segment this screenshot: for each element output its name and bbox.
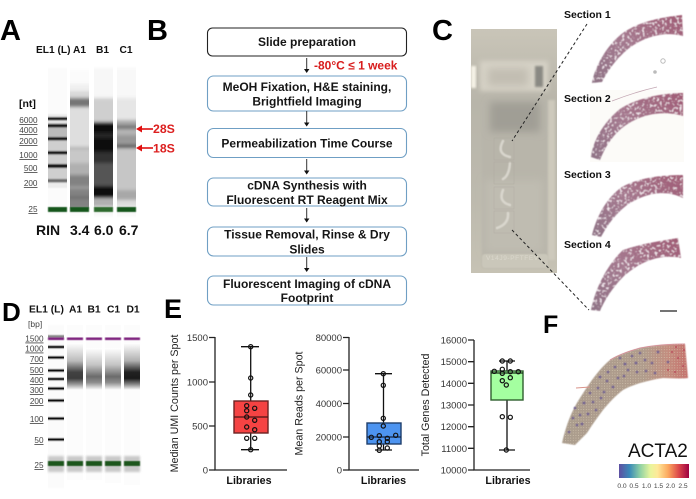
chart: median UMI counts: Median UMI Counts per Spot xyxy=(169,335,181,472)
bp labels: [bp] xyxy=(28,319,42,329)
panel E: box plots xyxy=(164,294,531,487)
chart: median UMI counts xyxy=(169,333,287,487)
lane C1 xyxy=(117,68,136,216)
lane labels A: C1 xyxy=(120,45,133,56)
nt size labels: 200 xyxy=(24,179,38,188)
panel C: slide photo and sections xyxy=(432,9,684,311)
nt size labels: 2000 xyxy=(19,137,38,146)
panel letter B: B xyxy=(147,15,168,47)
section labels: Section 1 xyxy=(564,9,611,21)
nt size labels: 4000 xyxy=(19,126,38,135)
panel letter D: D xyxy=(2,297,21,327)
section 1 tissue xyxy=(592,15,683,83)
panel letter C: C xyxy=(432,15,453,47)
step: fixation: MeOH Fixation, H&E staining, xyxy=(223,80,391,94)
section 2 tissue xyxy=(591,93,683,160)
RIN values xyxy=(36,222,139,238)
lane labels D: B1 xyxy=(88,304,101,316)
bp labels xyxy=(25,319,44,470)
chart: median UMI counts: 500 xyxy=(192,422,208,432)
step: tissue removal xyxy=(208,227,406,256)
panel B: workflow xyxy=(147,15,406,305)
lane labels D: EL1 (L) xyxy=(29,304,64,316)
bp labels: 500 xyxy=(30,366,44,375)
nt size labels xyxy=(19,98,38,214)
chart: total genes: 15000 xyxy=(441,357,467,368)
spatial tissue map xyxy=(562,344,688,445)
arrow xyxy=(304,159,309,174)
step: fluorescent imaging: Footprint xyxy=(281,291,333,305)
chart: total genes: Libraries xyxy=(485,475,531,487)
chart: total genes: 13000 xyxy=(441,400,467,412)
panel letter A: A xyxy=(0,15,21,47)
chart: total genes: Total Genes Detected xyxy=(420,354,432,456)
step: fixation xyxy=(208,76,406,111)
lane labels A: B1 xyxy=(96,45,109,56)
ladder lane D xyxy=(48,325,64,488)
panel A: RNA gel xyxy=(0,15,175,238)
colour bar ticks: 0.5 xyxy=(629,483,639,490)
chart: median UMI counts: 1000 xyxy=(187,378,208,388)
gene label: ACTA2 xyxy=(628,441,688,462)
RIN values: 6.0 xyxy=(94,222,114,238)
step: permeabilization xyxy=(208,128,406,158)
bp labels: 100 xyxy=(30,415,44,424)
section image backgrounds xyxy=(590,90,684,162)
nt size labels: 1000 xyxy=(19,151,38,160)
sample lanes D xyxy=(67,325,140,485)
lane labels A xyxy=(36,45,133,56)
slide photograph xyxy=(471,29,557,273)
RIN values: RIN xyxy=(36,222,60,238)
chart: mean reads: 0 xyxy=(337,466,342,476)
arrow 18S xyxy=(136,142,175,156)
green marker band A xyxy=(48,207,136,212)
section labels: Section 3 xyxy=(564,169,611,181)
arrow xyxy=(304,208,309,222)
lane labels A: EL1 (L) A1 xyxy=(36,45,86,56)
section 2 tissue strand xyxy=(612,87,657,101)
colour bar ticks: 1.5 xyxy=(654,483,663,490)
arrow xyxy=(304,257,309,272)
chart: median UMI counts: 0 xyxy=(203,466,208,476)
bp labels: 50 xyxy=(34,436,44,445)
arrow 28S xyxy=(136,122,175,136)
lane labels D xyxy=(29,304,140,316)
step: cDNA synthesis: Fluorescent RT Reagent Mix xyxy=(226,193,388,207)
lane A1 xyxy=(70,70,89,216)
chart: total genes: 10000 xyxy=(441,466,467,476)
nt size labels: 500 xyxy=(24,164,38,173)
step: tissue removal: Slides xyxy=(289,242,325,256)
colour bar ticks: 2.5 xyxy=(678,483,688,490)
arrow 28S: 28S xyxy=(153,122,175,136)
chart: mean reads: Mean Reads per Spot xyxy=(294,351,306,455)
panel letter F: F xyxy=(543,311,558,339)
chart: mean reads: 80000 xyxy=(316,333,342,344)
colour bar ticks: 1.0 xyxy=(642,483,651,490)
purple marker band xyxy=(48,338,140,340)
step: tissue removal: Tissue Removal, Rinse & Dry xyxy=(224,228,390,242)
lane labels D: C1 xyxy=(107,304,120,316)
lane B1 xyxy=(94,68,113,216)
section labels: Section 4 xyxy=(564,239,611,251)
step: cDNA synthesis xyxy=(208,178,406,207)
RIN values: 6.7 xyxy=(119,222,139,238)
green marker band D xyxy=(48,461,140,466)
chart: total genes: 11000 xyxy=(441,444,467,455)
panel D: library gel xyxy=(2,297,140,488)
chart: total genes xyxy=(420,336,531,487)
panel letter E: E xyxy=(164,294,182,324)
nt size labels: 25 xyxy=(28,205,38,214)
chart: mean reads: 20000 xyxy=(316,432,342,444)
bp labels: 1500 xyxy=(25,334,44,344)
colour bar ticks xyxy=(617,483,688,490)
arrow 18S: 18S xyxy=(153,142,175,156)
nt size labels: 6000 xyxy=(19,116,38,125)
slide barcode text: V14J9-PFTFEV xyxy=(486,255,539,262)
ladder lane xyxy=(48,68,67,214)
chart: median UMI counts: 1500 xyxy=(187,333,208,344)
section 4 tissue xyxy=(591,238,681,311)
step: cDNA synthesis: cDNA Synthesis with xyxy=(247,178,367,192)
colour bar ticks: 0.0 xyxy=(617,483,627,490)
nt size labels: [nt] xyxy=(19,98,36,110)
chart: total genes: 12000 xyxy=(441,422,467,433)
chart: mean reads xyxy=(294,333,419,487)
step: fluorescent imaging: Fluorescent Imaging of cDNA xyxy=(223,277,391,291)
bp labels: 25 xyxy=(34,461,44,470)
lane labels D: D1 xyxy=(126,304,140,316)
colour bar ticks: 2.0 xyxy=(666,483,675,490)
section 3 tissue xyxy=(592,175,683,237)
step: slide preparation: Slide preparation xyxy=(258,35,356,49)
tissue sections on slide xyxy=(497,141,510,228)
chart: median UMI counts: Libraries xyxy=(226,475,272,487)
bp labels: 700 xyxy=(30,355,44,364)
scale bar xyxy=(660,310,677,312)
lane labels D: A1 xyxy=(69,304,82,316)
bp labels: 1000 xyxy=(25,344,44,354)
chart: total genes: 14000 xyxy=(441,379,467,390)
step: slide preparation xyxy=(208,28,406,56)
arrow xyxy=(304,111,309,126)
arrow with storage note: -80°C ≤ 1 week xyxy=(314,58,398,72)
bp labels: 400 xyxy=(30,376,44,385)
bp labels: 300 xyxy=(30,386,44,395)
chart: total genes: 16000 xyxy=(441,336,467,346)
colour bar xyxy=(619,464,689,478)
chart: mean reads: 40000 xyxy=(316,399,342,410)
dashed zoom lines xyxy=(512,24,589,310)
step: permeabilization: Permeabilization Time Course xyxy=(221,136,393,150)
bp labels: 200 xyxy=(30,397,44,406)
chart: mean reads: 60000 xyxy=(316,366,342,376)
RIN values: 3.4 xyxy=(70,222,90,238)
step: fixation: Brightfield Imaging xyxy=(252,94,362,108)
chart: mean reads: Libraries xyxy=(361,475,406,487)
panel F: spatial expression map xyxy=(543,311,689,490)
section labels xyxy=(564,9,611,251)
step: fluorescent imaging xyxy=(208,276,406,305)
section labels: Section 2 xyxy=(564,93,611,105)
debris xyxy=(654,59,665,73)
